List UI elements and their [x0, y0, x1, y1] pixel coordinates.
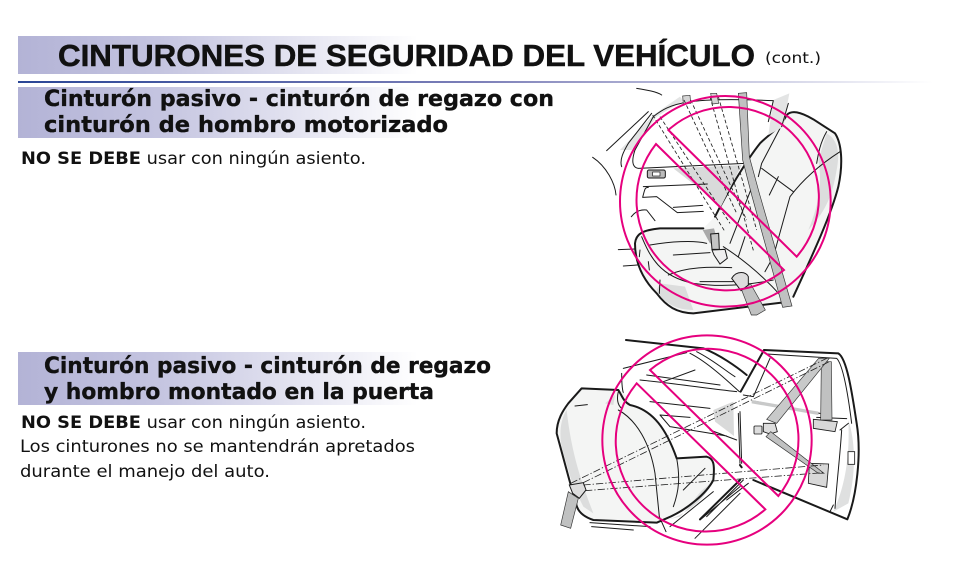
body text: door-mounted belt: NO SE DEBE usar con ningún asiento.: [21, 413, 366, 432]
prohibition sign: [602, 335, 812, 545]
title: CINTURONES DE SEGURIDAD DEL VEHÍCULO: [58, 38, 755, 73]
section heading: door-mounted belt: Cinturón pasivo - cinturón de regazo: [44, 354, 491, 379]
belt: [653, 93, 792, 315]
door: [622, 340, 859, 520]
seat: [593, 88, 841, 313]
body text: motorized belt: NO SE DEBE usar con ningún asiento.: [21, 149, 366, 168]
seat: [557, 358, 829, 538]
section heading: door-mounted belt: y hombro montado en la puerta: [44, 380, 434, 405]
illustration: front seat with motorized belt, prohibited: [593, 88, 841, 315]
continued note: (cont.): [765, 49, 821, 67]
section heading: door-mounted belt: [18, 352, 491, 405]
body text: door-mounted belt: [20, 413, 415, 481]
title band: [18, 36, 755, 74]
section heading: motorized belt: Cinturón pasivo - cinturón de regazo con: [44, 87, 554, 112]
section heading: motorized belt: cinturón de hombro motorizado: [44, 113, 448, 138]
illustration: door-mounted belt, prohibited: [557, 335, 859, 545]
dash panel: [622, 353, 748, 520]
prohibition sign: [620, 96, 831, 307]
body text: door-mounted belt: Los cinturones no se mantendrán apretados: [20, 437, 415, 456]
body text: door-mounted belt: durante el manejo del auto.: [20, 462, 270, 481]
section heading: motorized belt: [18, 87, 554, 138]
door and window: [620, 93, 789, 150]
